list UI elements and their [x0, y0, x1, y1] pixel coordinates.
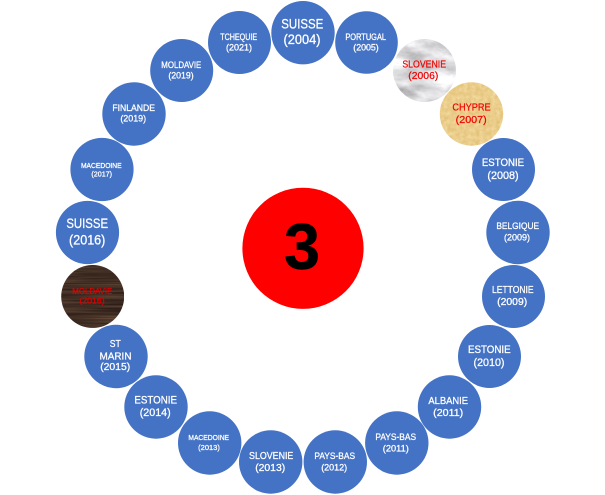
- node: Tchequie 2021: (2021): [226, 42, 252, 52]
- node: Finlande 2019: (2019): [120, 114, 146, 125]
- node: Belgique 2009: BELGIQUE: [496, 221, 539, 231]
- node: Slovenie 2013: SLOVENIE: [249, 450, 293, 462]
- node: Suisse 2004: SUISSE: [281, 15, 323, 31]
- node: Pays-Bas 2011: [365, 411, 428, 475]
- node: Macedoine 2017: MACEDOINE: [81, 161, 122, 170]
- node: Moldavie 2016 (dark wood texture): [61, 265, 124, 328]
- node: St Marin 2015: ST: [110, 338, 121, 350]
- node: Estonie 2008: (2008): [487, 170, 519, 182]
- node: Albanie 2011: [418, 375, 481, 439]
- node: Suisse 2016: [56, 201, 119, 264]
- node: Lettonie 2009: (2009): [497, 297, 527, 308]
- node: St Marin 2015: MARIN: [100, 350, 132, 362]
- node: Suisse 2016: (2016): [69, 232, 105, 248]
- node: Slovenie 2013: [239, 430, 302, 494]
- node: Moldavie 2016 (dark wood texture): (2016): [79, 296, 105, 306]
- node: Chypre 2007 (papyrus texture): (2007): [456, 114, 487, 126]
- node: Suisse 2004: [271, 1, 335, 64]
- node: Slovenie 2006 (marble texture): SLOVENIE: [402, 59, 446, 70]
- node: Macedoine 2013: [178, 411, 241, 475]
- node: Estonie 2014: ESTONIE: [134, 394, 177, 406]
- node: Belgique 2009: (2009): [504, 233, 530, 243]
- node: Albanie 2011: (2011): [433, 407, 463, 419]
- node: Slovenie 2006 (marble texture): (2006): [408, 71, 438, 82]
- node: Moldavie 2019: (2019): [168, 70, 194, 81]
- node: Portugal 2005: PORTUGAL: [345, 32, 386, 42]
- node: Estonie 2008: ESTONIE: [482, 157, 524, 169]
- centre circle: number 3: [242, 188, 364, 309]
- centre circle: number 3: 3: [284, 210, 320, 283]
- node: Macedoine 2013: (2013): [198, 443, 220, 452]
- node: Moldavie 2019: [150, 39, 213, 102]
- node: Portugal 2005: (2005): [353, 42, 379, 52]
- node: Suisse 2016: SUISSE: [66, 215, 108, 231]
- node: Tchequie 2021: [208, 11, 271, 74]
- node: Estonie 2014: (2014): [140, 407, 171, 419]
- node: Pays-Bas 2012: (2012): [321, 462, 347, 473]
- node: Estonie 2010: (2010): [474, 357, 504, 369]
- node: Macedoine 2017: (2017): [91, 169, 112, 178]
- node: Finlande 2019: [102, 82, 166, 146]
- node: St Marin 2015: (2015): [100, 361, 130, 373]
- node: Pays-Bas 2011: PAYS-BAS: [375, 432, 416, 443]
- node: Estonie 2010: [458, 325, 521, 388]
- node: Portugal 2005: [335, 11, 398, 74]
- node: Belgique 2009: [486, 201, 550, 264]
- node: Moldavie 2016 (dark wood texture): MOLDAVIE: [72, 286, 113, 296]
- node: Chypre 2007 (papyrus texture): CHYPRE: [452, 101, 491, 113]
- node: Moldavie 2019: MOLDAVIE: [161, 60, 201, 71]
- node: Slovenie 2013: (2013): [255, 462, 285, 474]
- node: Pays-Bas 2012: [304, 430, 367, 494]
- node: Pays-Bas 2012: PAYS-BAS: [314, 451, 355, 462]
- node: Finlande 2019: FINLANDE: [112, 103, 155, 114]
- node: Pays-Bas 2011: (2011): [383, 443, 409, 454]
- node: Tchequie 2021: TCHEQUIE: [220, 32, 257, 42]
- node: Estonie 2014: [124, 375, 188, 439]
- node: Slovenie 2006 (marble texture): [393, 39, 456, 102]
- node: Albanie 2011: ALBANIE: [428, 395, 468, 407]
- node: Estonie 2010: ESTONIE: [468, 344, 511, 356]
- node: Lettonie 2009: [482, 265, 545, 328]
- node: Macedoine 2013: MACEDOINE: [188, 433, 229, 442]
- node: Lettonie 2009: LETTONIE: [492, 285, 534, 296]
- node: Estonie 2008: [472, 138, 535, 201]
- node: Suisse 2004: (2004): [284, 31, 320, 47]
- node: Macedoine 2017: [70, 138, 134, 201]
- node: Chypre 2007 (papyrus texture): [439, 82, 504, 146]
- node: St Marin 2015: [84, 325, 148, 388]
